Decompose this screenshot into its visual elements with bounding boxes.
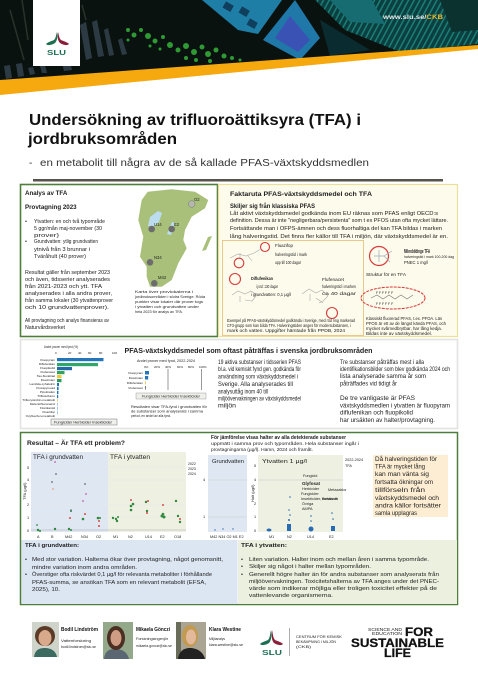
scatter chart: alla substanser: Halt (µg/l) <box>250 484 255 502</box>
scatter chart: TFA i grundvatten och ytvatten: B <box>51 535 54 539</box>
footer: person 2 <box>103 622 172 659</box>
fact text: lång halveringstid. Det finns fler källor till TFA i miljön, där växtskyddsmedel är en. <box>230 233 448 240</box>
scatter chart: alla substanser: Fungicid <box>303 474 317 478</box>
fact text: definition. Dessa är inte "negligerbara/persistenta" som t ex PFOS utan ofta mycket lättare. <box>230 218 448 224</box>
logo: education for sustainable life: EDUCATION <box>372 631 402 636</box>
lab note: Naturvårdsverket <box>25 324 66 331</box>
bar chart: most detected substances: Fluxapyroxad <box>36 386 55 390</box>
panel: TFA i grundvatten: • <box>25 572 27 578</box>
results paragraph: Resultat gäller från september 2023 <box>25 269 110 276</box>
text column: aktiva substanser: miljön <box>218 404 236 410</box>
callout: halveringstid: TFA är mycket lång <box>375 464 426 470</box>
centre name text: CENTRUM FÖR KEMISK <box>296 635 342 639</box>
chart: TFA subset: 20% <box>154 365 160 369</box>
scatter chart: alla substanser: E2 <box>329 535 334 539</box>
TFA molecule: Struktur för en TFA <box>366 272 406 277</box>
inner box: molecular structures: mark och vatten. Uppgifter hämtade från PPDB, 2024 <box>227 328 346 333</box>
inner box: molecular structures: Exempel på PFAS-växtskyddsmedel godkända i Sverige, med röd ring markerad <box>227 318 356 323</box>
scatter chart: TFA i grundvatten och ytvatten: 2022 <box>188 462 196 466</box>
panel: TFA i ytvatten: • <box>241 564 243 570</box>
scatter chart: alla substanser <box>203 455 363 539</box>
SLU logo box <box>33 0 80 66</box>
chart: TFA subset: 80% <box>188 365 194 369</box>
scatter chart: TFA i grundvatten och ytvatten: TFA i grundvatten <box>33 455 83 461</box>
footer: person 3: Miljöanalys <box>209 637 225 641</box>
chart: TFA subset: 100% <box>199 365 207 369</box>
bar chart: most detected substances: 100 <box>112 351 117 355</box>
footer: person 1: Vattenforskning <box>61 639 91 643</box>
bar chart: most detected substances <box>22 345 117 425</box>
sampling bullets: • <box>25 239 27 245</box>
inner box: molecular structures: halveringstid i marken <box>322 284 357 289</box>
long-chain PFAS molecule: F F F F F F <box>376 291 393 295</box>
scatter chart: TFA i grundvatten och ytvatten: M42 <box>65 535 72 539</box>
inner box: molecular structures: Fluazifop <box>275 243 294 248</box>
PFAS caption: PFOS är ett av de längst kända PFAS, och <box>366 321 447 326</box>
bar chart: most detected substances: Fluopyram <box>40 358 55 362</box>
bar chart: most detected substances: Fungicider Herbicider Insekticider <box>54 420 113 424</box>
centre name text <box>296 635 342 649</box>
footer: person 3: klara.westine@slu.se <box>209 643 243 647</box>
results paragraph: och 10 grundvattenprover). <box>25 305 109 311</box>
sampling bullets: ytnivå från 3 brunnar i <box>34 246 90 253</box>
chart caption: Resultaten visar TFA-fynd i grundvatten för <box>131 404 208 409</box>
scatter chart: alla substanser: Grundvatten <box>212 459 244 465</box>
bar chart: most detected substances: 60 <box>88 351 92 355</box>
title: jordbruksområden <box>27 130 177 148</box>
panel: TFA i ytvatten <box>238 540 457 604</box>
fact text <box>230 210 448 240</box>
inner box: molecular structures: ca 40 dagar <box>322 291 357 296</box>
scatter chart: alla substanser: U14 <box>307 535 314 539</box>
panel: TFA i ytvatten: vattenlevande organismerna. <box>249 593 334 599</box>
inner box: molecular structures: halveringstid i mark <box>275 252 308 257</box>
lab note <box>25 318 109 331</box>
footer: person 2: mikaela.gonczi@slu.se <box>136 644 172 648</box>
map caption: i ytvatten och grundvatten under <box>135 305 200 309</box>
footer: person 3: Klara Westine <box>209 627 241 633</box>
footer: person 1: Bodil Lindström <box>61 627 99 633</box>
heading: resultat: Resultat – Är TFA ett problem? <box>27 439 125 447</box>
chart caption <box>131 404 208 418</box>
callout: halveringstid: andra källor fortsätter <box>375 502 441 510</box>
text column: tre substanser: lista analyserade samma år som <box>340 373 426 380</box>
panel: TFA i grundvatten: mindre variation inom andra områden. <box>32 564 137 571</box>
callout: halveringstid: växtskyddsmedel och <box>375 495 440 502</box>
scatter chart: alla substanser: 1 <box>203 515 205 519</box>
PFAS caption: Bildas inte av växtskyddsmedel. <box>366 331 432 336</box>
sampling bullets: prover) <box>34 233 59 239</box>
text column: aktiva substanser: användning som växtskyddsmedel i <box>218 374 298 380</box>
scatter chart: alla substanser: AMPA <box>302 507 313 511</box>
chart: TFA subset: 60% <box>177 365 183 369</box>
chart: TFA subset: Fluopyram <box>128 371 143 375</box>
bar chart: most detected substances: 20 <box>68 351 72 355</box>
scatter chart: alla substanser: TFA <box>345 464 352 468</box>
chart: TFA subset: Andel prover med fynd, 2022-2024 <box>137 359 195 363</box>
panel: resultat <box>20 432 458 604</box>
chart: TFA subset: Diflufenikan <box>127 381 143 385</box>
scatter chart: TFA i grundvatten och ytvatten: A <box>37 535 40 539</box>
map of southern Sweden: M42 <box>158 275 167 280</box>
panel: TFA i ytvatten: Skiljer sig något i halter mellan typområden. <box>249 563 371 570</box>
bar chart: most detected substances: Oxyfluorfen-metabolit <box>26 414 55 418</box>
inner box: molecular structures: Diflufenikan <box>251 276 273 282</box>
scatter chart: alla substanser: 4 <box>254 478 256 482</box>
callout: halveringstid: tillförseln från <box>375 487 426 494</box>
scatter chart: TFA i grundvatten och ytvatten: 0 <box>27 529 29 533</box>
map of southern Sweden: N34 <box>154 255 162 260</box>
map caption: jordbruksområden i södra Sverige. Röda <box>134 295 206 299</box>
bar chart: most detected substances: Tau-fluvalinat <box>37 374 55 378</box>
comparison intro text: För jämförelse visas halter av alla detekterade substanser <box>211 435 346 441</box>
sampling bullets: Tväråhult (40 prover) <box>34 253 86 260</box>
scatter chart: alla substanser: Metazaklor <box>328 488 347 492</box>
footer: person 1 <box>32 622 99 657</box>
footer: person 1: bodil.lindstrom@slu.se <box>61 645 96 649</box>
lab note: All provtagning och analys finansieras av <box>25 318 109 324</box>
text column: tre substanser: har ursäkten av halter/provtagning. <box>340 418 435 424</box>
bar chart: most detected substances: Lambda-cyhalotrin <box>30 382 55 386</box>
panel: TFA i grundvatten: • <box>25 557 27 563</box>
sampling bullets: • <box>25 219 27 225</box>
bar chart: most detected substances: Trifloxystrobin-metabolit <box>22 398 55 402</box>
TFA molecule: Mikrobildinge TFA <box>404 249 430 255</box>
divider <box>33 179 443 182</box>
comparison intro text: provtagningarna (µg/l). Hamn, 2024 och framåt. <box>211 447 313 452</box>
scatter chart: alla substanser: 5 <box>254 464 256 468</box>
text column: tre substanser: växtskyddsmedlen i ytvatten är fluopyram <box>340 404 450 410</box>
centre name text: (CKB) <box>296 645 312 649</box>
scatter chart: TFA i grundvatten och ytvatten: U14 <box>145 535 152 539</box>
text column: tre substanser: påträffades vid tidigt år <box>340 380 397 388</box>
panel: TFA i grundvatten <box>22 540 238 604</box>
text column: aktiva substanser: miljöövervakningen av växtskyddsmedel <box>218 396 301 402</box>
chart: TFA subset: Fungicider Herbicider Insekticider <box>142 394 201 398</box>
text column: aktiva substanser: 19 aktiva substanser i tidsserien PFAS <box>218 360 301 366</box>
scatter chart: TFA i grundvatten och ytvatten: M1 <box>113 535 118 539</box>
bar chart: most detected substances: Picolinafen <box>40 390 55 394</box>
bar chart: most detected substances: Andel prover med fynd (%) <box>44 345 79 349</box>
inner box: molecular structures: i jord: 130 dagar <box>256 284 278 289</box>
panel: TFA i grundvatten: Överstiger ofta riskvärdet 0,1 µg/l för relevanta metaboliter i förhållande <box>32 571 212 578</box>
header photo banner <box>0 0 478 81</box>
long-chain PFAS molecule: F F F F F F <box>376 302 393 306</box>
map of southern Sweden <box>138 189 212 287</box>
text column: aktiva substanser: Sverige. Alla analyserades till <box>218 382 293 388</box>
bar chart: most detected substances: Flufenacet <box>41 370 55 374</box>
subheading: Skiljer sig från klassiska PFAS <box>230 203 315 210</box>
scatter chart: alla substanser: N2 <box>287 535 292 539</box>
logo: education for sustainable life <box>351 627 444 660</box>
scatter chart: TFA i grundvatten och ytvatten: N34 <box>81 535 88 539</box>
panel: TFA i ytvatten: • <box>241 557 243 563</box>
TFA molecule: halveringstid i mark 100-200 dag <box>404 254 454 259</box>
bar chart: most detected substances: Flonikamid <box>40 406 55 410</box>
heading: faktaruta: Faktaruta PFAS-växtskyddsmedel och TFA <box>230 191 372 198</box>
chart: TFA subset <box>127 359 207 399</box>
text column: aktiva substanser <box>218 360 301 410</box>
map caption <box>134 290 206 314</box>
scatter chart: TFA i grundvatten och ytvatten: N2 <box>128 535 133 539</box>
scatter chart: TFA i grundvatten och ytvatten <box>22 452 196 539</box>
logo: education for sustainable life: SUSTAINABLE <box>351 638 444 650</box>
bar chart: most detected substances: 40 <box>78 351 82 355</box>
bar chart: most detected substances: Fluopikolid <box>40 366 55 370</box>
inner box: molecular structures: CF3-grupp som kan bilda TFA. Halveringstiden anges för modersubstansen, i <box>227 323 351 328</box>
results paragraph: analyserades i alla andra prover, <box>25 291 112 297</box>
map caption: punkter visar lokaler där prover togs <box>135 300 203 304</box>
text column: aktiva substanser: bl.a. vid kemiskt fynd gen. godkända för <box>218 367 301 373</box>
panel: TFA i ytvatten: • <box>241 572 243 578</box>
callout: halveringstid: samla upplagras <box>375 510 417 517</box>
results paragraph: och även, tidsserier analyserades <box>25 277 110 283</box>
bar chart: most detected substances: Triflusulfuron <box>37 394 55 398</box>
scatter chart: alla substanser: 2022-2024 <box>345 458 363 462</box>
text column: tre substanser <box>340 359 450 424</box>
title <box>27 112 361 148</box>
bar chart: most detected substances: 80 <box>99 351 103 355</box>
panel: analys av TFA <box>20 184 218 336</box>
TFA molecule: PNEC 1 mg/l <box>404 260 428 265</box>
results paragraph <box>25 269 113 311</box>
scatter chart: alla substanser: Övriga <box>302 502 314 506</box>
fact text: Fortsättande man i OFPS-ämnen och dess fluorhaltiga del kan TFA bildas i marken <box>230 226 442 232</box>
results paragraph: från samma lokaler (30 ytvattenprover <box>25 297 113 304</box>
footer: person 2: Forskningsingenjör <box>136 637 169 641</box>
scatter chart: alla substanser: M1 <box>269 535 274 539</box>
scatter chart: TFA i grundvatten och ytvatten: 4 <box>27 478 29 482</box>
scatter chart: TFA i grundvatten och ytvatten: O18 <box>174 535 181 539</box>
PFAS caption <box>366 316 447 336</box>
scatter chart: alla substanser: 2 <box>254 502 256 506</box>
panel: TFA i ytvatten: miljöövervakningen. Toxicitetshalterna av TFA anges under det PNEC- <box>249 579 439 585</box>
scatter chart: alla substanser: 1 <box>254 515 256 519</box>
SLU logo footer: SLU <box>262 650 282 657</box>
chart caption: de substanser som analyserats i samma <box>131 408 204 414</box>
scatter chart: TFA i grundvatten och ytvatten: 1 <box>27 516 29 520</box>
chart: TFA subset: 40% <box>165 365 171 369</box>
bar chart: most detected substances: 0 <box>55 351 57 355</box>
map of southern Sweden: E2 <box>174 222 180 227</box>
map of southern Sweden: O2 <box>194 197 200 202</box>
TFA molecule <box>366 246 454 277</box>
photo 1 <box>32 622 59 657</box>
photo 3 <box>176 622 206 659</box>
subtitle: - <box>29 158 32 169</box>
url text: www.slu.se/ CKB <box>382 14 444 21</box>
panel: PFAS-växtskyddsmedel som oftast påträffas <box>20 340 458 428</box>
PFAS caption: mycket svårnedbrytbar, har lång kedja. <box>366 326 442 331</box>
panel: TFA i ytvatten: värde som indikerar möjliga eller troligen toxicitet effekter på de <box>249 585 437 592</box>
scatter chart: alla substanser: Insekticider, metabolit <box>301 497 338 501</box>
scatter chart: TFA i grundvatten och ytvatten: 5 <box>27 466 29 470</box>
panel: TFA i grundvatten: 2025), 10. <box>32 587 60 593</box>
callout: halveringstid: Då halveringstiden för <box>375 456 437 463</box>
centre name text: BEKÄMPNING I MILJÖN <box>296 640 336 644</box>
chart caption: period, en andel av alla fynd. <box>131 413 171 418</box>
scatter chart: alla substanser: Ytvatten 1 µg/l <box>262 459 307 465</box>
photo 2 <box>103 622 133 659</box>
SLU logo box: SLU <box>47 50 66 57</box>
map caption: hela 2023 för analys av TFA. <box>135 310 183 314</box>
sampling bullets <box>25 218 105 260</box>
panel: faktaruta PFAS <box>218 184 458 336</box>
scatter chart: TFA i grundvatten och ytvatten: 2024 <box>188 472 196 476</box>
panel: TFA i grundvatten: TFA i grundvatten: <box>25 543 79 549</box>
callout: halveringstid <box>373 455 448 517</box>
comparison intro text: uppmätt i samma prov och typområden. Hela substanser ingår i <box>211 441 359 446</box>
panel: TFA i grundvatten: PFAS-summa, se ansökan TFA som en relevant metabolit (EFSA, <box>32 580 206 586</box>
scatter chart: TFA i grundvatten och ytvatten: 2 <box>27 503 29 507</box>
text column: tre substanser: diflufenikan och fluopikolid <box>340 410 413 416</box>
inner box: molecular structures: Flufenacet <box>322 277 345 282</box>
scatter chart: TFA i grundvatten och ytvatten: TFA (µg/l) <box>22 482 27 500</box>
sampling bullets: Ytvatten: en och två typområde <box>34 218 105 225</box>
chart: TFA subset: Fluazinam <box>129 376 143 380</box>
scatter chart: alla substanser: Herbicider <box>302 487 320 491</box>
bar chart: most detected substances: Fluazinam <box>41 378 55 382</box>
logo: education for sustainable life: LIFE <box>384 648 411 660</box>
scatter chart: TFA i grundvatten och ytvatten: E2 <box>160 535 165 539</box>
footer: person 2: Mikaela Gönczi <box>136 627 171 633</box>
scatter chart: alla substanser: Glyfosat <box>302 481 321 486</box>
text column: tre substanser: De tre vanligaste är PFAS <box>340 396 415 402</box>
panel: TFA i ytvatten: Liten variation. Halter inom och mellan åren i samma typområde. <box>249 556 429 563</box>
inner box: molecular structures: upp till 100 dagar <box>275 260 301 265</box>
scatter chart: alla substanser: Bentazon <box>322 497 338 501</box>
scatter chart: alla substanser: 4 <box>203 478 205 482</box>
orange stripe <box>0 45 478 95</box>
inner box: molecular structures: i grundvatten: 0,1 µg/l <box>251 292 291 297</box>
scatter chart: TFA i grundvatten och ytvatten: TFA i ytvatten <box>110 455 150 461</box>
long-chain PFAS molecule <box>361 287 425 309</box>
logo: education for sustainable life: FOR <box>405 627 434 639</box>
callout: halveringstid: fortsatta ökningar om <box>375 479 433 486</box>
heading: PFAS-växtskyddsmedel som oftast påträffas i svenska jordbruksområden <box>124 346 372 355</box>
SLU logo footer <box>260 630 283 657</box>
scatter chart: TFA i grundvatten och ytvatten: O2 <box>96 535 101 539</box>
text column: aktiva substanser: analysuttåg inom 40 till <box>218 388 268 396</box>
scatter chart: alla substanser: M42 N34 O2 M1 E2 <box>210 535 244 539</box>
chart: TFA subset: 0% <box>144 365 149 369</box>
map caption: Karta över provlokalerna i <box>135 290 193 294</box>
callout: halveringstid: kan man vänta sig <box>375 471 430 478</box>
PFAS caption: Klassiskt fluorerad PFAS, t.ex. PFOA. Läs <box>366 316 442 321</box>
sampling bullets: 5 ggr/mån maj-november (30 <box>34 225 102 232</box>
results paragraph: från 2021-2023 och ytt. TFA <box>25 283 102 290</box>
panel: TFA i grundvatten: Med stor variation. Halterna ökar över provtagning, något genomsnitt, <box>32 556 223 563</box>
logo: education for sustainable life: SCIENCE AND <box>368 627 402 632</box>
bar chart: most detected substances: Diflufenikan <box>39 362 55 366</box>
scatter chart: alla substanser: 0 <box>254 529 256 533</box>
map of southern Sweden: U14 <box>154 222 162 227</box>
comparison intro text <box>211 435 359 452</box>
inner box: molecular structures <box>222 240 364 336</box>
bar chart: most detected substances: Fluazifop <box>42 410 55 414</box>
heading: analys: Analys av TFA <box>25 190 68 197</box>
title: Undersökning av trifluoroättiksyra (TFA) i <box>29 112 361 129</box>
divider <box>288 628 291 656</box>
scatter chart: TFA i grundvatten och ytvatten: 2023 <box>188 467 196 471</box>
heading: provtagning: Provtagning 2023 <box>25 204 77 211</box>
text column: tre substanser: Tre substanser påträffas mest i alla <box>340 359 425 366</box>
panel: TFA i ytvatten: TFA i ytvatten: <box>241 543 287 549</box>
panel: TFA i ytvatten: Generellt högre halter än för andra substanser som analyserats från <box>249 571 439 578</box>
scatter chart: alla substanser: Fungicider <box>301 492 319 496</box>
bar chart: most detected substances: Mefentrifluconazol <box>30 402 55 406</box>
subtitle: en metabolit till några av de så kallade PFAS-växtskyddsmedlen <box>40 157 369 169</box>
footer: person 3 <box>176 622 243 659</box>
sampling bullets: Grundvatten: ytlig grundvatten <box>34 239 98 245</box>
text column: tre substanser: identifikationsbilder som blev godkända 2024 och <box>340 367 450 373</box>
chart: TFA subset: Flufenacet <box>129 386 143 390</box>
fact text: Låt aktivt växtskyddsmedel godkända inom EU räknas som PFAS enligt OECD:s <box>230 210 438 217</box>
